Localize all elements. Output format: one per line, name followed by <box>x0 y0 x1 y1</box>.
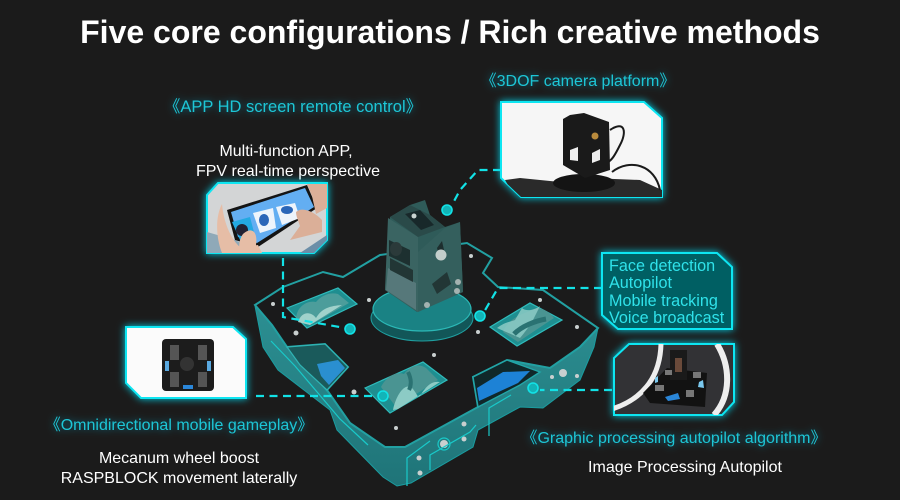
robot <box>255 200 598 486</box>
title: Five core configurations / Rich creative methods <box>80 14 820 50</box>
robot top plate <box>255 243 598 447</box>
camera turret body <box>385 200 463 312</box>
connector: APP panel <box>283 258 355 334</box>
panel: APP photo <box>207 183 327 253</box>
text: image processing autopilot: Image Processing Autopilot <box>588 459 782 476</box>
connector: functions box <box>475 288 602 321</box>
panel: functions list box <box>602 253 732 329</box>
panel: functions list box: Voice broadcast <box>609 309 725 327</box>
text: mecanum description: RASPBLOCK movement laterally <box>61 470 297 487</box>
wheel: front <box>365 362 447 413</box>
robot side walls <box>255 306 598 486</box>
panel: camera platform photo <box>501 102 662 197</box>
text: APP description: FPV real-time perspective <box>196 163 380 180</box>
panel: autopilot photo <box>612 344 734 415</box>
panel: omnidirectional photo <box>126 327 246 398</box>
panel: functions list box: Face detection <box>609 257 715 275</box>
wheel: right <box>490 303 562 346</box>
text: mecanum description <box>61 450 297 487</box>
heading: APP remote control: 《APP HD screen remote control》 <box>164 97 422 116</box>
heading: omnidirectional gameplay: 《Omnidirectional mobile gameplay》 <box>45 417 313 434</box>
connector: camera platform <box>442 170 501 215</box>
connector: omnidirectional panel <box>256 391 388 401</box>
heading: autopilot algorithm: 《Graphic processing autopilot algorithm》 <box>521 430 827 447</box>
panel: functions list box: Autopilot <box>609 274 672 292</box>
text: mecanum description: Mecanum wheel boost <box>99 450 260 467</box>
screws <box>271 254 579 476</box>
text: APP description <box>196 143 380 180</box>
wheel well: left blue <box>287 344 348 390</box>
wall accent lines <box>271 341 511 486</box>
heading: camera platform: 《3DOF camera platform》 <box>481 73 675 90</box>
text: APP description: Multi-function APP, <box>219 143 353 160</box>
connector: autopilot photo <box>528 383 612 393</box>
panel: functions list box: Mobile tracking <box>609 292 718 310</box>
wheel: rear left <box>287 288 357 328</box>
wheel well: front blue <box>473 360 540 407</box>
camera turret base <box>371 287 473 341</box>
